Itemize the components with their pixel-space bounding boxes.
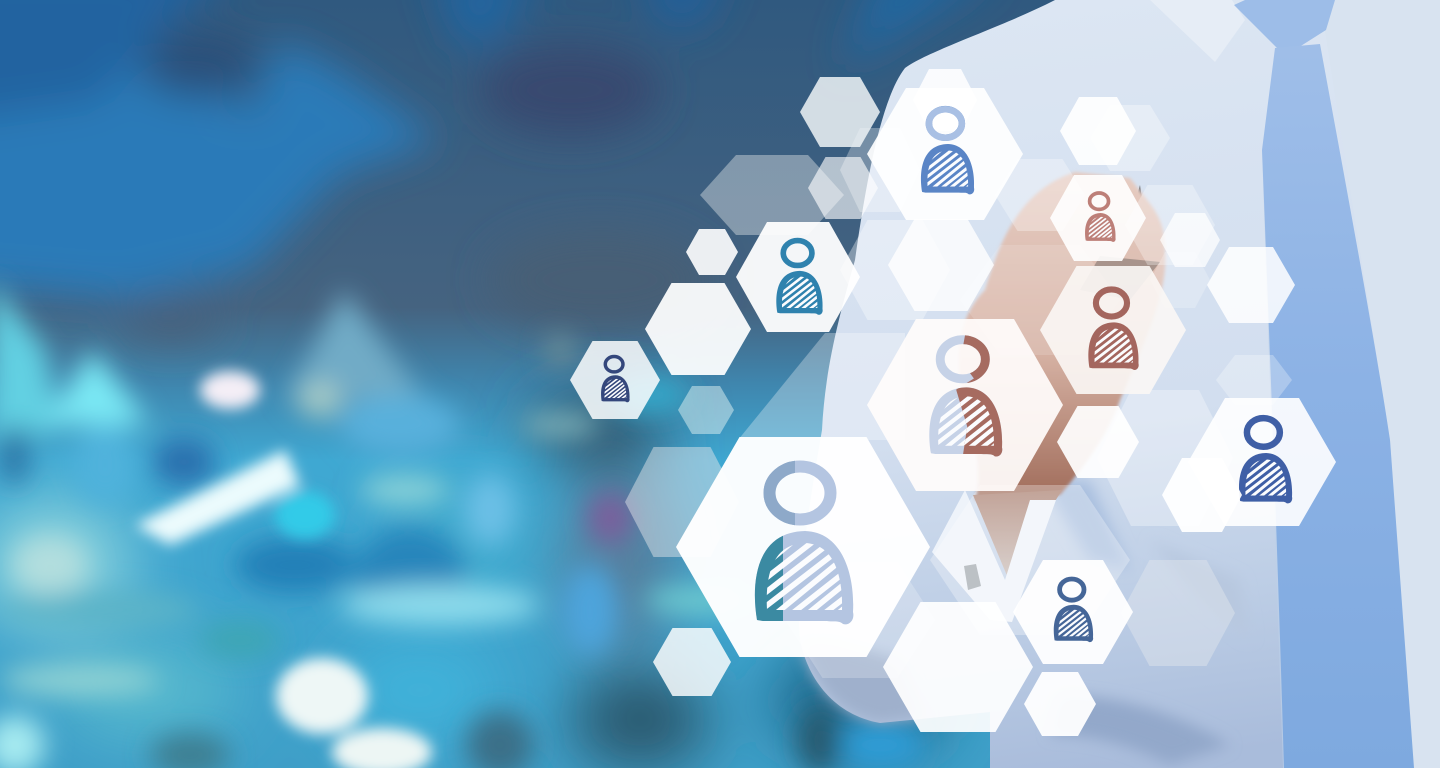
person icon bbox=[755, 466, 853, 624]
people hexagon: on hand bbox=[1040, 266, 1186, 394]
person icon bbox=[1239, 418, 1292, 503]
person icon bbox=[929, 340, 1002, 456]
cufflink bbox=[964, 564, 981, 590]
blurred world map bbox=[0, 0, 1000, 340]
shirt cuff bbox=[932, 490, 1056, 622]
people hexagon: top centre bbox=[867, 88, 1023, 220]
solid white hexagons bbox=[645, 69, 1295, 736]
people hexagon: large bottom bbox=[676, 437, 930, 657]
people hexagon: upper left bbox=[736, 222, 860, 332]
people hexagon: centre bbox=[867, 319, 1063, 491]
tie bbox=[1234, 0, 1414, 768]
person icon bbox=[1088, 289, 1139, 370]
people hexagon: lower right bbox=[1013, 560, 1133, 664]
businessman shirt bbox=[799, 0, 1440, 768]
shadow beside tie bbox=[1262, 150, 1290, 768]
person icon bbox=[601, 357, 630, 402]
person icon bbox=[776, 241, 823, 315]
blurred skyline bbox=[0, 390, 950, 768]
light wedge left of shirt bbox=[738, 333, 905, 440]
people hexagon: on marker bbox=[1050, 175, 1146, 261]
people hexagon: right bbox=[1188, 398, 1336, 526]
hexagon overlapping right person bbox=[1162, 458, 1242, 532]
person icon bbox=[1085, 193, 1116, 242]
person icon bbox=[921, 109, 974, 194]
head tint bbox=[929, 109, 962, 138]
translucent hexagon backdrop bbox=[625, 105, 1292, 678]
hand holding marker bbox=[932, 172, 1165, 622]
person icon bbox=[1054, 579, 1093, 642]
people hexagon: far left bbox=[570, 341, 660, 419]
wrist bbox=[973, 490, 1062, 578]
